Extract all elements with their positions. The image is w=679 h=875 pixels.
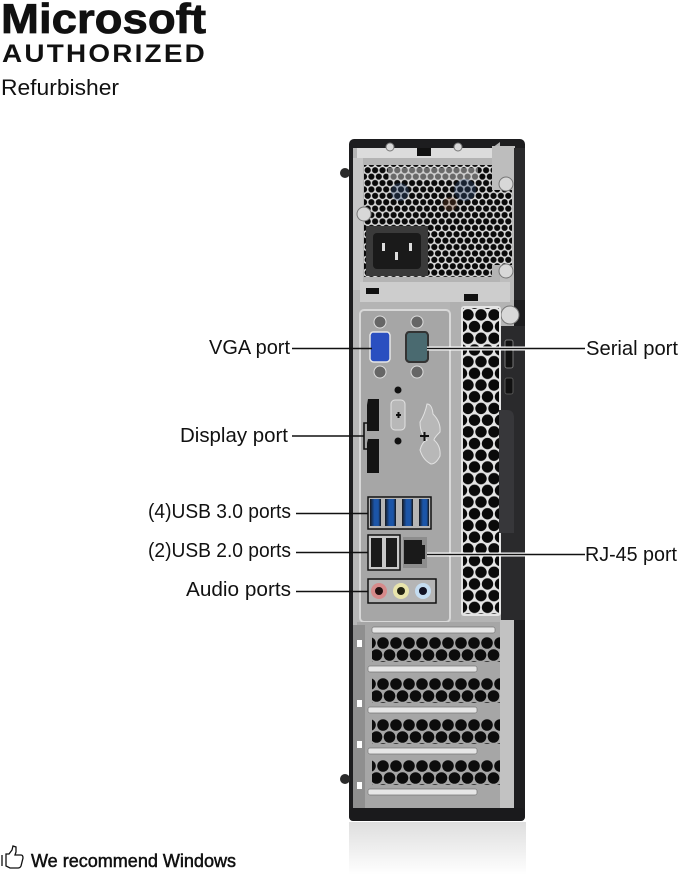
callout: Serial port: Serial port — [586, 338, 678, 360]
icon: thumbs up — [2, 846, 23, 868]
case bottom edge — [349, 808, 525, 821]
I/O panel — [360, 310, 450, 622]
top bracket — [357, 148, 492, 158]
USB 2.0 ports — [368, 535, 400, 570]
RJ-45 port — [403, 537, 427, 568]
computer tower rear view — [340, 139, 526, 875]
footer note — [2, 846, 236, 871]
case screws — [357, 143, 519, 811]
slot bars — [368, 627, 495, 795]
Audio ports — [368, 579, 436, 603]
power inlet — [366, 226, 428, 276]
Serial port — [406, 316, 428, 378]
case body — [349, 139, 525, 821]
metal back plate — [353, 142, 514, 815]
power supply vent — [364, 165, 512, 277]
highlight on fan blades — [388, 168, 478, 180]
callout: RJ-45 port: RJ-45 port — [585, 544, 677, 566]
USB 3.0 ports — [368, 497, 431, 529]
callout: USB 3.0 ports: (4)USB 3.0 ports — [148, 501, 291, 523]
clips — [357, 640, 362, 789]
subtitle: AUTHORIZED: AUTHORIZED — [2, 40, 207, 68]
right side latch — [499, 326, 525, 620]
knockout plates — [391, 386, 440, 464]
callout: Display port — [180, 423, 368, 449]
callout: Display port: Display port — [180, 425, 288, 447]
side vent grille — [461, 306, 501, 616]
DisplayPort connectors — [367, 399, 379, 473]
recommendation text: We recommend Windows — [31, 851, 236, 871]
subtitle: Refurbisher: Refurbisher — [1, 75, 119, 100]
expansion slots — [353, 620, 514, 812]
slot vents — [372, 637, 500, 785]
heading: Microsoft Authorized Refurbisher — [1, 0, 207, 100]
callout: VGA port: VGA port — [209, 337, 290, 359]
callout: Audio ports: Audio ports — [186, 579, 291, 601]
side rails — [353, 158, 363, 290]
audio and USB surrounds with ports — [368, 497, 436, 603]
reflection under tower — [349, 822, 526, 875]
VGA port — [370, 316, 390, 378]
side knobs — [340, 168, 350, 784]
callout: USB 2.0 ports: (2)USB 2.0 ports — [148, 540, 291, 562]
